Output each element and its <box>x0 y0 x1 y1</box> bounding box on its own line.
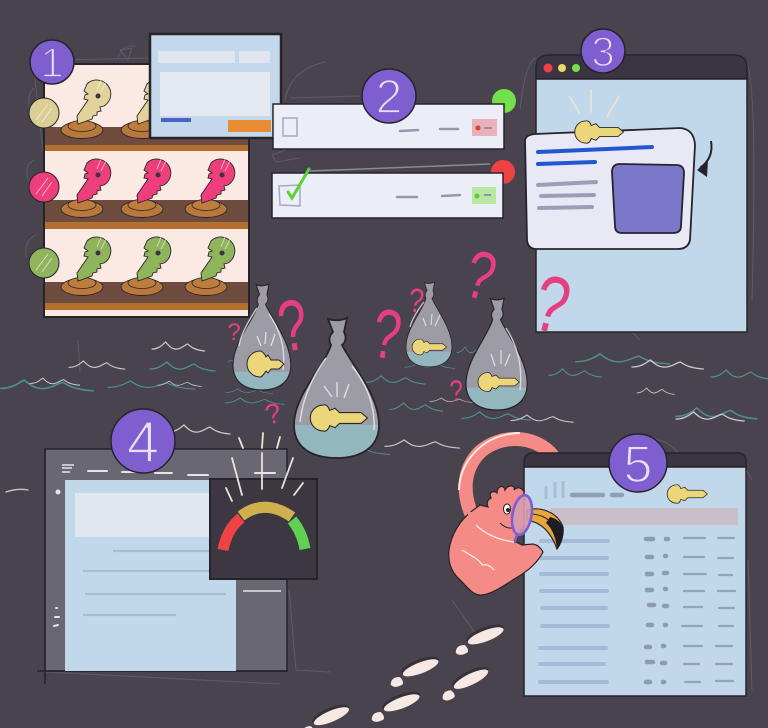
question mark small left: ? <box>227 319 241 346</box>
question mark small right: ? <box>407 280 426 320</box>
sparkle rays <box>570 90 619 117</box>
pale waves <box>6 342 744 492</box>
row of pink keys <box>61 159 235 218</box>
badge 1: 1 <box>40 39 64 86</box>
table rows <box>540 538 735 682</box>
table window <box>524 453 746 696</box>
connector <box>310 164 490 171</box>
badge 5: 5 <box>624 436 652 494</box>
page content <box>65 480 236 671</box>
flamingo neck <box>459 433 553 520</box>
colour swatches <box>29 98 59 278</box>
flamingo beak <box>527 509 563 549</box>
shelves <box>45 127 248 310</box>
teal waves <box>0 347 768 454</box>
badge 3: 3 <box>591 28 615 75</box>
badge 1 <box>30 39 74 86</box>
footprints <box>297 621 508 728</box>
popup window <box>150 34 281 138</box>
question mark large centre: ? <box>367 293 407 375</box>
panel 2: checklist rows <box>272 69 516 218</box>
flamingo eye <box>504 504 510 514</box>
bag 3 <box>405 282 454 370</box>
gauge rays <box>226 433 303 501</box>
status dot red <box>491 160 515 184</box>
badge 3 <box>581 28 625 75</box>
question marks <box>227 235 579 430</box>
panel 4: page with gauge <box>37 409 317 684</box>
panel 5: results table <box>524 434 746 696</box>
question mark small lower right: ? <box>448 373 464 408</box>
card <box>525 128 695 249</box>
panel 3: browser with card <box>525 28 747 332</box>
key icon <box>667 485 707 503</box>
badge 2: 2 <box>376 71 402 124</box>
row of beige keys <box>61 80 171 138</box>
row 2 <box>272 169 503 218</box>
question mark large left: ? <box>273 284 313 368</box>
arrow <box>697 141 712 177</box>
table header <box>546 481 738 525</box>
wing highlights <box>462 525 514 570</box>
question mark on browser edge: ? <box>525 257 579 352</box>
checkmark <box>288 169 309 198</box>
bag 1 <box>232 284 293 395</box>
bag 2 <box>292 318 382 461</box>
flamingo smile <box>500 523 513 528</box>
row 1 <box>273 104 504 149</box>
bag 4 <box>465 298 529 413</box>
question mark small below: ? <box>262 397 284 430</box>
shelf board <box>44 64 249 317</box>
flamingo neck join <box>468 512 480 522</box>
panel 1: key shelves <box>29 34 281 317</box>
page frame <box>37 449 287 684</box>
question mark tall: ? <box>458 235 504 316</box>
badge 2 <box>362 69 416 124</box>
badge 5 <box>609 434 667 494</box>
browser window <box>536 55 747 332</box>
badge 4: 4 <box>127 410 159 475</box>
status dot green <box>492 89 516 113</box>
gold key <box>575 121 623 143</box>
row of green keys <box>61 237 235 296</box>
flamingo <box>449 486 563 595</box>
gauge box <box>210 479 317 579</box>
badge 4 <box>111 409 175 475</box>
flamingo body and head <box>449 486 543 595</box>
magnifying glass <box>509 494 535 543</box>
waves <box>0 342 768 492</box>
